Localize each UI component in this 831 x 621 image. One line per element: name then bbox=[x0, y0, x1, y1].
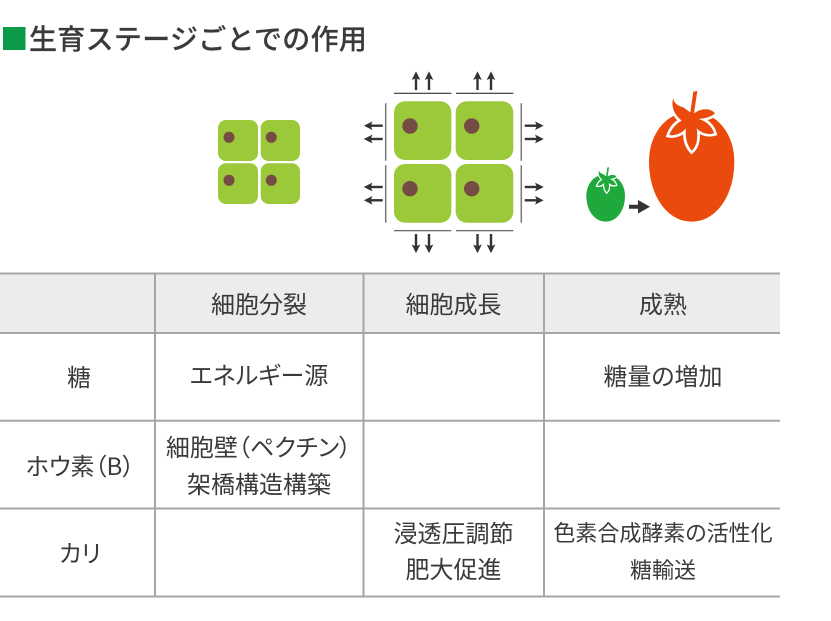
row label: sugar: 糖 bbox=[67, 358, 91, 393]
header: cell growth: 細胞成長 bbox=[406, 285, 502, 320]
potassium: fruit enlargement: 肥大促進 bbox=[406, 550, 502, 585]
row label: boron: ホウ素（B） bbox=[26, 447, 134, 482]
sugar: energy source: エネルギー源 bbox=[190, 356, 328, 391]
table bbox=[0, 273, 780, 597]
arrows: outward expansion bbox=[369, 76, 538, 248]
diagram: enlarged cells (cell growth) bbox=[386, 93, 521, 231]
diagram: small cells (cell division) bbox=[218, 120, 300, 204]
table grid bbox=[0, 273, 780, 597]
potassium: osmotic pressure: 浸透圧調節 bbox=[394, 514, 514, 549]
table header background bbox=[0, 273, 780, 333]
row label: potassium: カリ bbox=[59, 534, 101, 569]
header: ripening: 成熟 bbox=[639, 285, 687, 320]
icon: large ripe red fruit bbox=[649, 91, 734, 222]
title: 生育ステージごとでの作用 bbox=[29, 18, 367, 58]
potassium: pigment enzyme: 色素合成酵素の活性化 bbox=[553, 516, 773, 548]
potassium: sugar transport: 糖輸送 bbox=[630, 553, 696, 585]
sugar: sugar increase: 糖量の増加 bbox=[603, 357, 723, 392]
icon: small green fruit bbox=[586, 167, 625, 222]
boron: cross-link: 架橋構造構築 bbox=[187, 465, 331, 500]
arrow: growth to ripe fruit bbox=[629, 200, 650, 214]
header: cell division: 細胞分裂 bbox=[211, 285, 307, 320]
boron: cell wall: 細胞壁（ペクチン） bbox=[166, 428, 351, 463]
